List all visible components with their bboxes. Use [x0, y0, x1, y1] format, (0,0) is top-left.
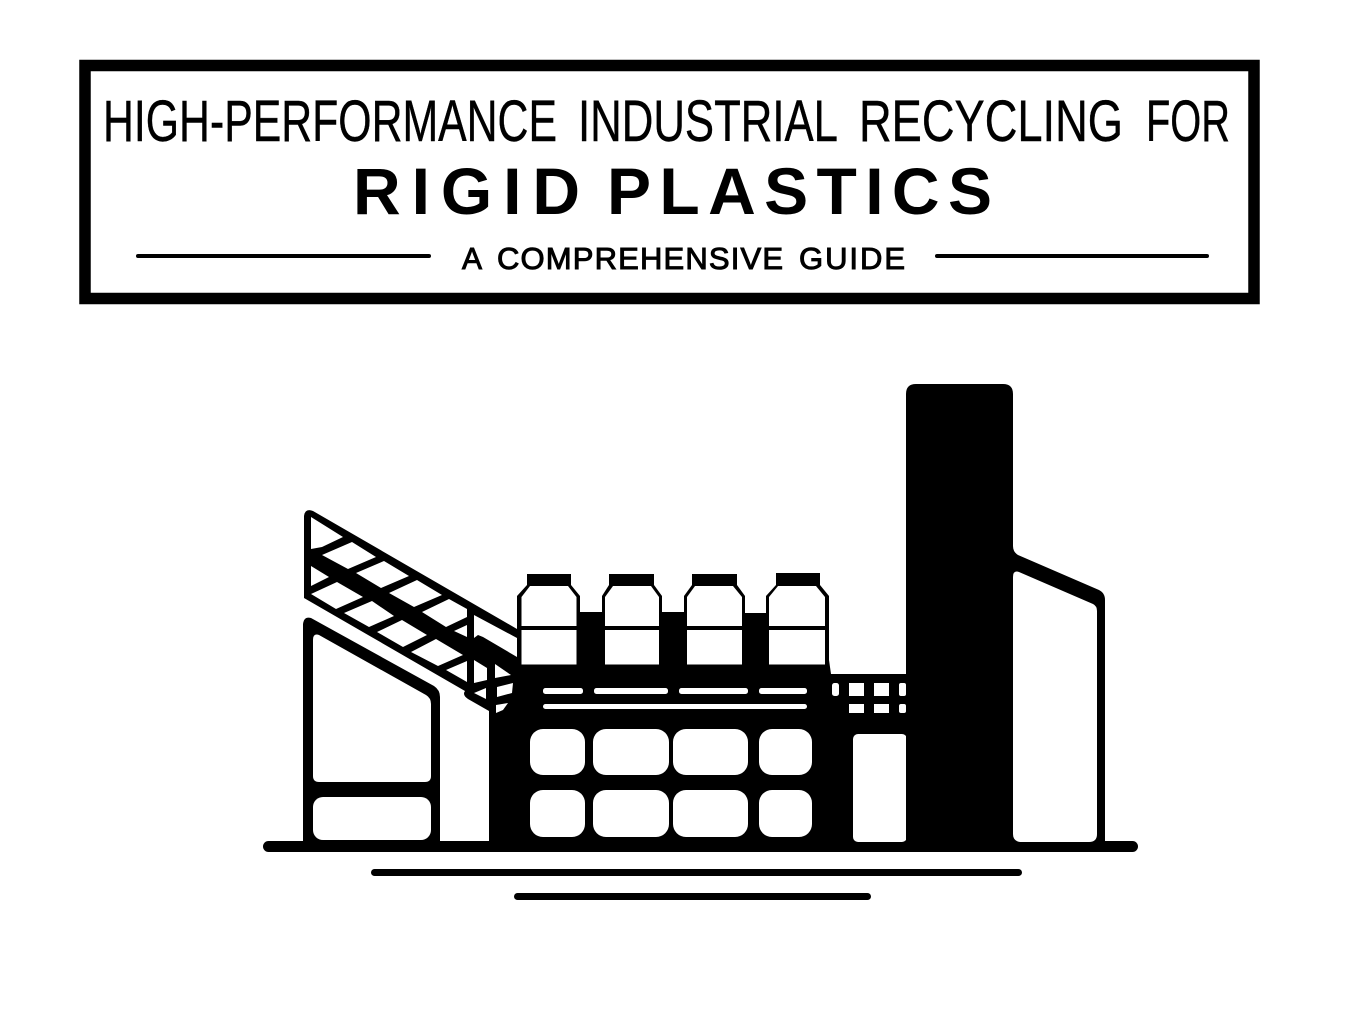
ground lines [263, 841, 1138, 900]
heading: high-performance industrial recycling for: INDUSTRIAL [578, 89, 838, 154]
title banner [85, 66, 1254, 298]
subtitle [462, 241, 905, 276]
tall door [853, 734, 907, 842]
large windows [530, 729, 812, 837]
heading: high-performance industrial recycling for: HIGH-PERFORMANCE [103, 89, 557, 154]
left subtitle rule [136, 254, 431, 258]
heading: rigid plastics [353, 154, 992, 228]
subtitle: A [462, 241, 482, 276]
right subtitle rule [935, 254, 1209, 258]
heading: high-performance industrial recycling for [103, 89, 1230, 154]
subtitle: COMPREHENSIVE [497, 241, 783, 276]
left building [303, 618, 440, 845]
heading: rigid plastics: PLASTICS [607, 154, 992, 228]
small grid windows [832, 683, 906, 713]
illustration: recycling plant [263, 384, 1138, 900]
banner frame [85, 66, 1254, 298]
tower and right silo [906, 384, 1105, 845]
conveyor truss and main plant body [304, 510, 907, 846]
truss openings [311, 517, 517, 713]
horizontal slots [543, 688, 807, 709]
heading: rigid plastics: RIGID [353, 154, 580, 228]
silo jars [522, 586, 825, 664]
subtitle: GUIDE [799, 241, 905, 276]
heading: high-performance industrial recycling for: RECYCLING [859, 89, 1123, 154]
heading: high-performance industrial recycling for: FOR [1146, 89, 1230, 154]
